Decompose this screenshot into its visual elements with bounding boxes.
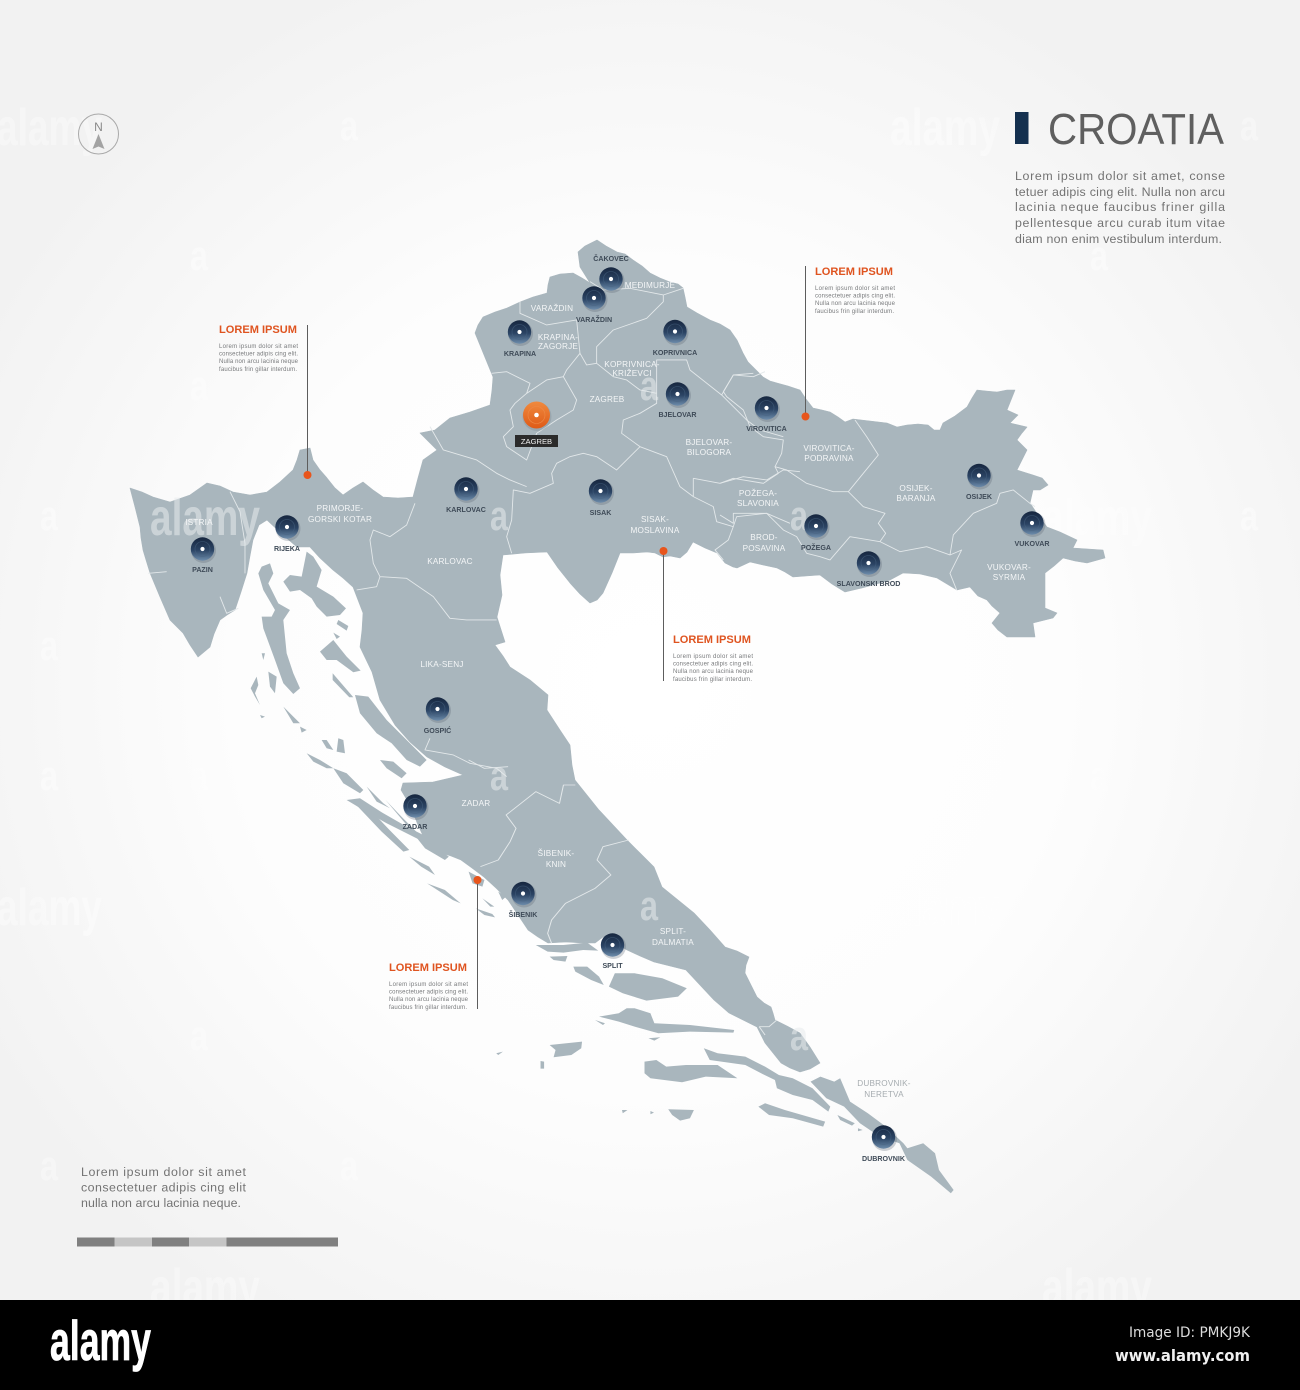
callout: Primorje: Lorem ipsum dolor sit amet: [219, 344, 298, 350]
watermarks over the map: a: [790, 1012, 808, 1059]
city pin: Rijeka: RIJEKA: [274, 545, 300, 553]
county labels: ZAGREB: [590, 395, 625, 404]
city pin: Gospić: GOSPIĆ: [424, 726, 451, 735]
city pin: Koprivnica: [653, 320, 697, 357]
city pin: Pazin: PAZIN: [192, 566, 213, 574]
county labels: OSIJEK-: [899, 484, 933, 493]
watermarks: alamy: [0, 879, 102, 937]
watermarks: a: [40, 492, 58, 539]
callout: Zadar islands: Lorem ipsum dolor sit amet: [389, 982, 468, 988]
compass: [78, 114, 118, 154]
county borders south: [469, 760, 777, 1035]
city pin: Bjelovar: BJELOVAR: [658, 411, 697, 419]
callout: Virovitica: Lorem ipsum dolor sit amet: [815, 286, 895, 292]
county labels: MOSLAVINA: [631, 526, 680, 535]
watermarks: alamy: [890, 879, 1000, 937]
callout: Primorje: Nulla non arcu lacinia neque: [219, 359, 299, 365]
county labels: SPLIT-: [660, 927, 686, 936]
callout: Zadar islands: LOREM IPSUM: [389, 962, 467, 974]
county labels: NERETVA: [864, 1090, 904, 1099]
watermarks over the map: a: [490, 492, 508, 539]
watermarks: a: [40, 752, 58, 799]
county labels: POSAVINA: [743, 544, 786, 553]
image id: Image ID: PMKJ9K: [1129, 1325, 1250, 1341]
city pin: Šibenik: [509, 882, 538, 919]
county labels: KOPRIVNICA-: [604, 360, 660, 369]
county labels: SLAVONIA: [737, 499, 779, 508]
watermarks over the map: [150, 362, 808, 1059]
city pin: Krapina: KRAPINA: [504, 350, 536, 358]
callout: Sisak: Nulla non arcu lacinia neque: [673, 669, 754, 675]
footer bar: [0, 1300, 1300, 1390]
city pin: Slavonski Brod: [837, 551, 900, 588]
watermarks: a: [1090, 752, 1108, 799]
city pin: Karlovac: KARLOVAC: [446, 506, 486, 514]
bottom paragraph: [81, 1165, 247, 1210]
city pin: Sisak: [589, 479, 614, 517]
county labels: SISAK-: [641, 515, 669, 524]
city pin: Koprivnica: KOPRIVNICA: [653, 349, 697, 357]
county labels: ISTRIA: [185, 518, 213, 527]
callout: Zadar islands: Nulla non arcu lacinia neque: [389, 997, 469, 1003]
watermarks: a: [190, 1012, 208, 1059]
watermarks: a: [190, 752, 208, 799]
callout: Primorje: [219, 324, 312, 479]
county labels: PODRAVINA: [804, 454, 854, 463]
county labels: ZADAR: [462, 799, 490, 808]
county labels: MEĐIMURJE: [625, 281, 676, 290]
callout: Virovitica: [802, 266, 896, 420]
watermarks: alamy: [890, 99, 1000, 157]
city pin: Rijeka: [274, 515, 300, 553]
city pin: Sisak: SISAK: [590, 509, 612, 517]
county borders east: [720, 373, 1035, 590]
watermarks: a: [1240, 492, 1258, 539]
callout: Sisak: consectetuer adipis cing elit.: [673, 662, 753, 668]
bottom paragraph: nulla non arcu lacinia neque.: [81, 1196, 241, 1210]
watermarks: a: [340, 102, 358, 149]
callout: Primorje: LOREM IPSUM: [219, 324, 297, 336]
watermarks: a: [1090, 232, 1108, 279]
city pin: Split: [601, 933, 626, 970]
city pin: Čakovec: [593, 254, 629, 293]
watermarks over the map: a: [790, 492, 808, 539]
callout: Virovitica: Nulla non arcu lacinia neque: [815, 301, 896, 307]
intro paragraph: diam non enim vestibulum interdum.: [1015, 232, 1222, 246]
county labels: [185, 281, 1031, 1099]
scale bar: [77, 1238, 338, 1246]
watermarks: a: [40, 622, 58, 669]
county labels: VUKOVAR-: [987, 563, 1031, 572]
alamy logo: alamy: [50, 1309, 151, 1372]
watermarks: alamy: [1042, 489, 1152, 547]
callout: Primorje: consectetuer adipis cing elit.: [219, 352, 298, 358]
county labels: BILOGORA: [687, 448, 732, 457]
county labels: SYRMIA: [993, 573, 1026, 582]
county labels: KNIN: [546, 860, 566, 869]
county labels: ŠIBENIK-: [538, 848, 574, 858]
city pin: Osijek: [966, 464, 993, 501]
county labels: BROD-: [750, 533, 778, 542]
bottom paragraph: consectetuer adipis cing elit: [81, 1180, 247, 1194]
county labels: KARLOVAC: [427, 557, 473, 566]
county labels: PRIMORJE-: [317, 504, 363, 513]
callout: Zadar islands: [389, 876, 482, 1011]
city pin: Dubrovnik: DUBROVNIK: [862, 1155, 906, 1163]
intro paragraph: pellentesque arcu curab itum vitae: [1015, 216, 1225, 230]
northern Adriatic islands: [251, 552, 433, 840]
city pin: Požega: POŽEGA: [801, 543, 831, 552]
title: CROATIA: [1048, 105, 1225, 154]
city pin: Čakovec: ČAKOVEC: [593, 254, 629, 263]
intro paragraph: lacinia neque faucibus friner gilla: [1015, 200, 1225, 214]
city pin: Požega: [801, 514, 831, 552]
watermarks: a: [40, 1142, 58, 1189]
callout: Primorje: faucibus frin gillar interdum.: [219, 367, 297, 373]
callout: Virovitica: consectetuer adipis cing elit.: [815, 294, 895, 300]
intro paragraph: tetuer adipis cing elit. Nulla non arcu: [1015, 185, 1225, 199]
city pin: Split: SPLIT: [602, 962, 623, 970]
compass: N: [94, 120, 103, 134]
callout: Sisak: Lorem ipsum dolor sit amet: [673, 654, 753, 660]
intro paragraph: [1015, 169, 1225, 246]
callout: Zadar islands: faucibus frin gillar interdum.: [389, 1005, 467, 1011]
county labels: DALMATIA: [652, 938, 694, 947]
watermarks: a: [1240, 102, 1258, 149]
county labels: BJELOVAR-: [686, 438, 732, 447]
watermarks: alamy: [0, 99, 102, 157]
watermarks over the map: alamy: [150, 489, 260, 547]
website: www.alamy.com: [1115, 1346, 1250, 1365]
city pin: Varaždin: [576, 286, 612, 324]
intro paragraph: Lorem ipsum dolor sit amet, conse: [1015, 169, 1225, 183]
watermarks: alamy: [1042, 1259, 1152, 1317]
callout: Sisak: LOREM IPSUM: [673, 634, 751, 646]
city pin: Virovitica: [746, 396, 787, 433]
city pin: Slavonski Brod: SLAVONSKI BROD: [837, 580, 900, 588]
county labels: DUBROVNIK-: [857, 1079, 911, 1088]
county labels: POŽEGA-: [739, 488, 777, 498]
capital pin: Zagreb: [515, 402, 558, 447]
city pin: Vukovar: VUKOVAR: [1015, 540, 1049, 548]
city pin: Dubrovnik: [862, 1125, 906, 1163]
county labels: VIROVITICA-: [803, 444, 855, 453]
city pin: Varaždin: VARAŽDIN: [576, 315, 612, 324]
watermarks over the map: a: [640, 362, 658, 409]
watermarks over the map: a: [490, 752, 508, 799]
city pin: Bjelovar: [658, 382, 697, 419]
city pin: Osijek: OSIJEK: [966, 493, 993, 501]
city pin: Pazin: [191, 537, 216, 574]
county labels: GORSKI KOTAR: [308, 515, 372, 524]
county labels: KRIŽEVCI: [612, 368, 652, 378]
city pin: Zadar: [403, 794, 428, 831]
watermarks: a: [190, 362, 208, 409]
mainland: [130, 240, 1105, 1072]
city pin: Šibenik: ŠIBENIK: [509, 910, 538, 919]
city pin: Karlovac: [446, 477, 486, 514]
map of Croatia: [130, 240, 1105, 1193]
watermarks: a: [190, 232, 208, 279]
watermarks over the map: a: [640, 882, 658, 929]
callout: Sisak: faucibus frin gillar interdum.: [673, 677, 752, 683]
bottom paragraph: Lorem ipsum dolor sit amet: [81, 1165, 247, 1179]
county labels: VARAŽDIN: [531, 303, 573, 313]
watermarks: alamy: [150, 1259, 260, 1317]
city pin: Krapina: [504, 320, 536, 358]
city pin: Gospić: [424, 697, 451, 735]
county labels: ZAGORJE: [538, 342, 578, 351]
watermarks: a: [940, 622, 958, 669]
city pin: Virovitica: VIROVITICA: [746, 425, 787, 433]
southern Adriatic islands and Dubrovnik exclave: [350, 800, 954, 1193]
callout: Zadar islands: consectetuer adipis cing elit.: [389, 990, 468, 996]
county labels: LIKA-SENJ: [420, 660, 464, 669]
county borders west: [148, 492, 507, 777]
callout: Virovitica: faucibus frin gillar interdum.: [815, 309, 894, 315]
watermarks: a: [340, 1142, 358, 1189]
callout: Sisak: [660, 547, 754, 683]
callout: Virovitica: LOREM IPSUM: [815, 266, 893, 278]
city pin: Zadar: ZADAR: [403, 823, 427, 831]
county labels: BARANJA: [896, 494, 936, 503]
capital pin: Zagreb: ZAGREB: [521, 437, 552, 446]
county labels: KRAPINA-: [538, 333, 578, 342]
county borders north: [430, 282, 800, 560]
city pin: Vukovar: [1015, 511, 1049, 548]
